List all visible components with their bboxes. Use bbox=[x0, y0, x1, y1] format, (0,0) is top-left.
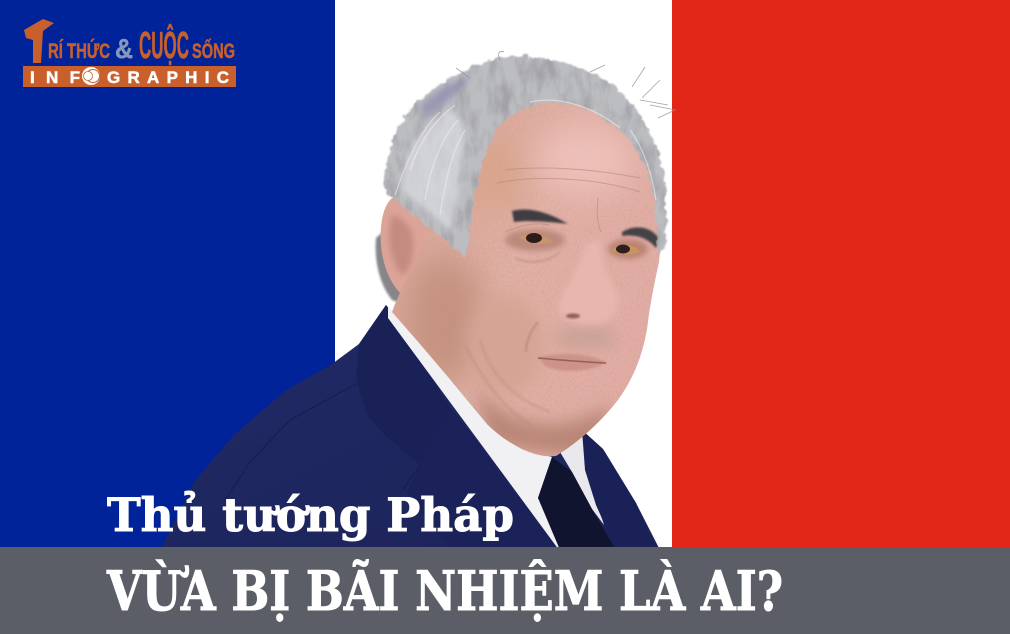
headline line 2: VỪA BỊ BÃI NHIỆM LÀ AI? bbox=[106, 559, 783, 623]
tie bbox=[538, 457, 616, 550]
lower lapel bbox=[407, 408, 559, 550]
hair bbox=[385, 51, 676, 258]
blue-tinted hair edge bbox=[420, 76, 472, 120]
stray hairs bbox=[456, 51, 676, 118]
logo wordmark: RÍ THỨC bbox=[48, 39, 110, 63]
portrait of the prime minister bbox=[160, 51, 676, 550]
eye socket shadow right bbox=[608, 239, 648, 259]
jacket seam bbox=[225, 384, 420, 500]
bottom grey banner bbox=[0, 547, 1010, 634]
right eyebrow bbox=[622, 227, 660, 248]
logo wordmark: & bbox=[115, 33, 133, 64]
flag: blue stripe bbox=[0, 0, 335, 634]
temple tone bbox=[474, 140, 526, 214]
logo: Tri Thuc & Cuoc Song Infographic bbox=[23, 19, 236, 87]
eye socket shadow left bbox=[505, 229, 565, 251]
forehead highlight bbox=[535, 125, 635, 195]
left eyebrow bbox=[512, 209, 568, 224]
shirt collar bbox=[388, 306, 576, 550]
hair mass bbox=[385, 56, 667, 258]
logo wordmark: SỐNG bbox=[192, 39, 235, 63]
logo orange band bbox=[23, 66, 236, 87]
jacket lapel bbox=[356, 305, 451, 465]
logo T mark bbox=[24, 19, 54, 63]
hair behind the ear bbox=[376, 215, 405, 305]
face bbox=[392, 101, 664, 456]
forehead wrinkles bbox=[497, 168, 640, 232]
flag: red stripe bbox=[672, 0, 1010, 634]
logo wordmark: CUỘC bbox=[139, 22, 189, 67]
right lapel bbox=[582, 430, 656, 550]
nose bbox=[558, 240, 618, 324]
logo band text bbox=[30, 68, 229, 87]
headline line 1: Thủ tướng Pháp bbox=[107, 488, 514, 542]
logo wordmark bbox=[48, 22, 235, 67]
logo disc icon bbox=[82, 67, 100, 85]
logo band text: INF bbox=[30, 68, 80, 87]
flag: white stripe bbox=[335, 0, 672, 634]
neck folds bbox=[467, 342, 550, 418]
right shirt sliver bbox=[560, 432, 604, 525]
left eye bbox=[518, 233, 553, 244]
under-eye bag bbox=[515, 252, 560, 262]
cheek shadow bbox=[405, 255, 485, 385]
upper lip shadow bbox=[553, 328, 617, 348]
nostril bbox=[566, 314, 580, 318]
nasolabial fold bbox=[526, 322, 538, 352]
ear inner fold bbox=[389, 215, 413, 275]
hair streaks bbox=[395, 100, 656, 215]
light hair highlight bbox=[402, 111, 463, 232]
mouth bbox=[538, 354, 606, 371]
right eye bbox=[610, 244, 640, 254]
jaw shadow bbox=[473, 393, 611, 456]
ear bbox=[381, 195, 440, 303]
suit jacket bbox=[160, 305, 660, 550]
logo band text: GRAPHIC bbox=[107, 68, 229, 87]
lower cheek tone bbox=[467, 295, 543, 395]
